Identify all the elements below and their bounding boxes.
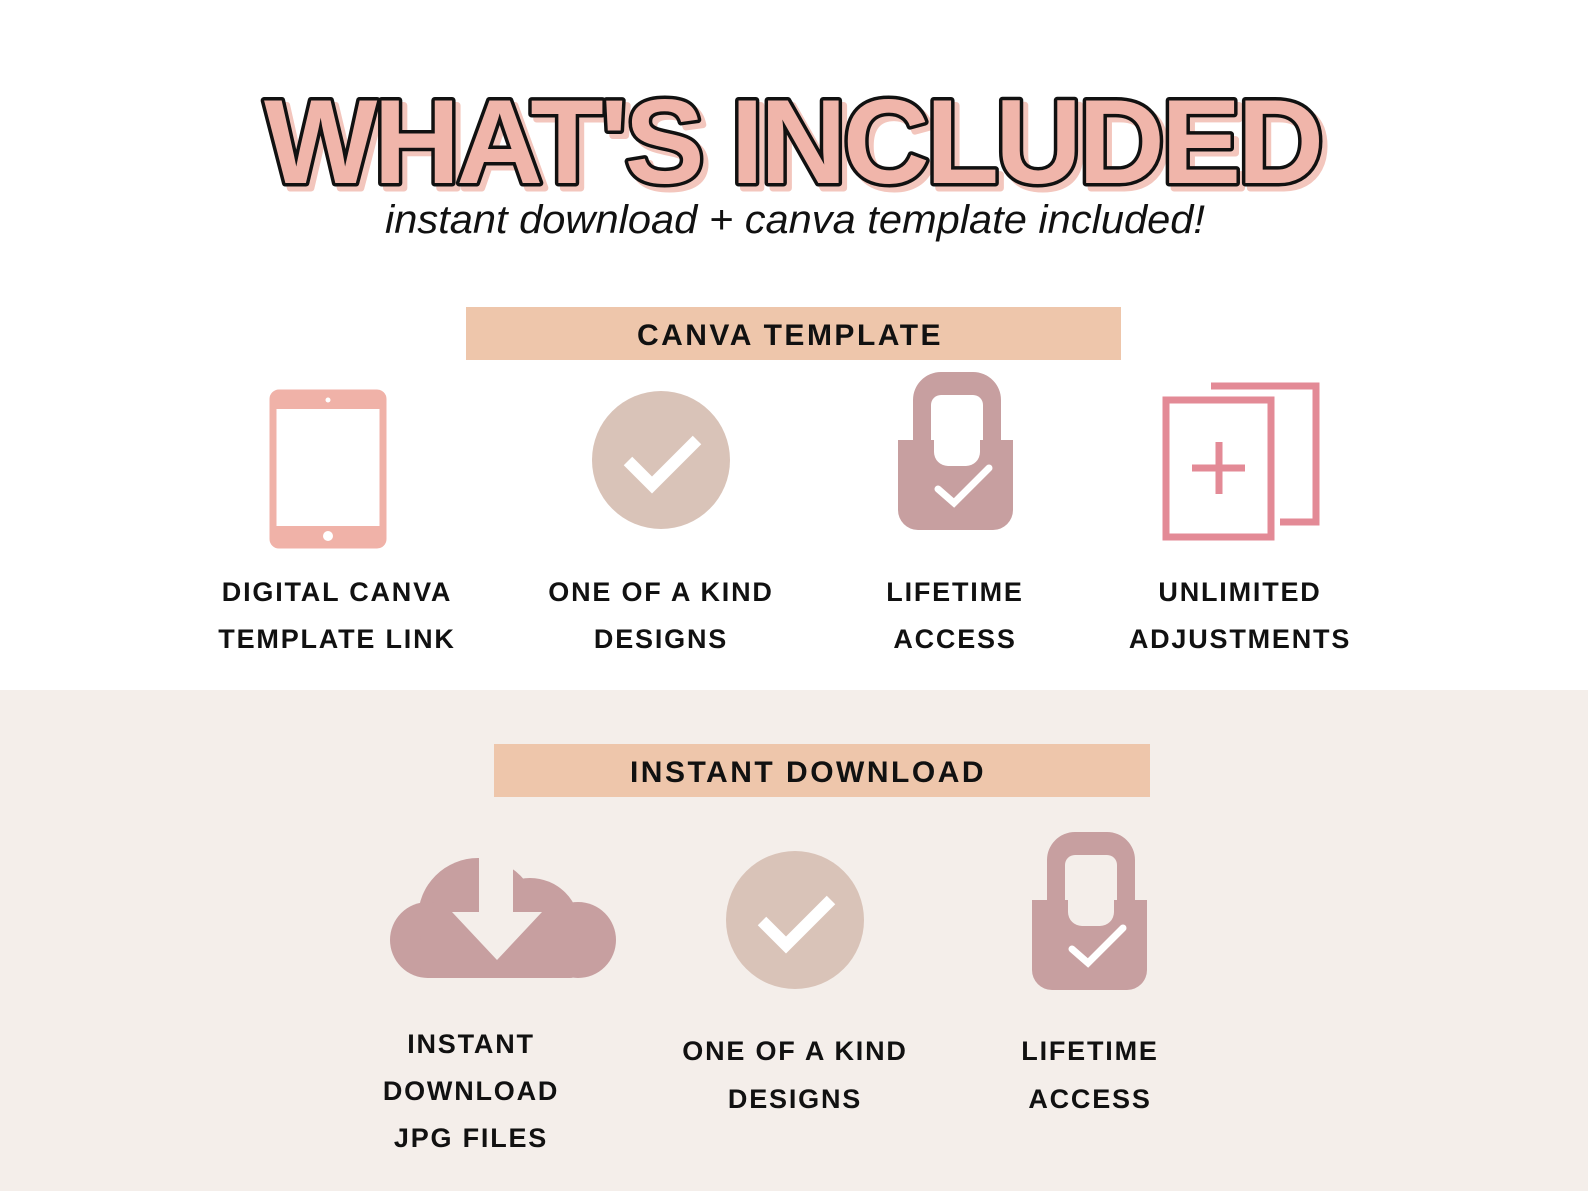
label: lifetime 2 (1021, 1036, 1159, 1114)
icon: check circle 2 (726, 851, 864, 989)
label: one of a kind: DESIGNS (594, 624, 728, 654)
lower section background (0, 690, 1588, 1191)
label: instant download jpg: INSTANT (407, 1029, 535, 1059)
icon: lock 2 (1032, 832, 1147, 990)
label: lifetime (886, 577, 1024, 654)
label: lifetime 2: ACCESS (1028, 1084, 1152, 1114)
subtitle: instant download + canva template included! (385, 198, 1205, 242)
label: one of a kind 2: ONE OF A KIND (682, 1036, 908, 1066)
label: unlimited: ADJUSTMENTS (1129, 624, 1351, 654)
label: instant download jpg: JPG FILES (394, 1123, 548, 1153)
band: instant download (494, 744, 1150, 797)
label: one of a kind 2 (682, 1036, 908, 1114)
icon: lock (898, 372, 1013, 530)
label: one of a kind: ONE OF A KIND (548, 577, 774, 607)
label: unlimited (1129, 577, 1351, 654)
labels row 1: TEMPLATE LINK (218, 624, 456, 654)
label: unlimited: UNLIMITED (1158, 577, 1322, 607)
icon: check circle (592, 391, 730, 529)
icon: tablet (273, 393, 383, 545)
label: instant download jpg (383, 1029, 559, 1153)
label: lifetime: ACCESS (893, 624, 1017, 654)
title: WHAT'S INCLUDED (269, 80, 1329, 214)
label: instant download jpg: DOWNLOAD (383, 1076, 559, 1106)
icon: copies plus (1166, 386, 1316, 537)
label: lifetime 2: LIFETIME (1021, 1036, 1159, 1066)
label: lifetime: LIFETIME (886, 577, 1024, 607)
band: instant download: INSTANT DOWNLOAD (630, 756, 986, 789)
labels row 1 (218, 577, 456, 654)
labels row 1: DIGITAL CANVA (222, 577, 452, 607)
label: one of a kind (548, 577, 774, 654)
title: WHAT'S INCLUDED (264, 75, 1324, 209)
label: one of a kind 2: DESIGNS (728, 1084, 862, 1114)
band: canva template (466, 307, 1121, 360)
band: canva template: CANVA TEMPLATE (637, 319, 943, 352)
icon: cloud download (390, 850, 616, 978)
